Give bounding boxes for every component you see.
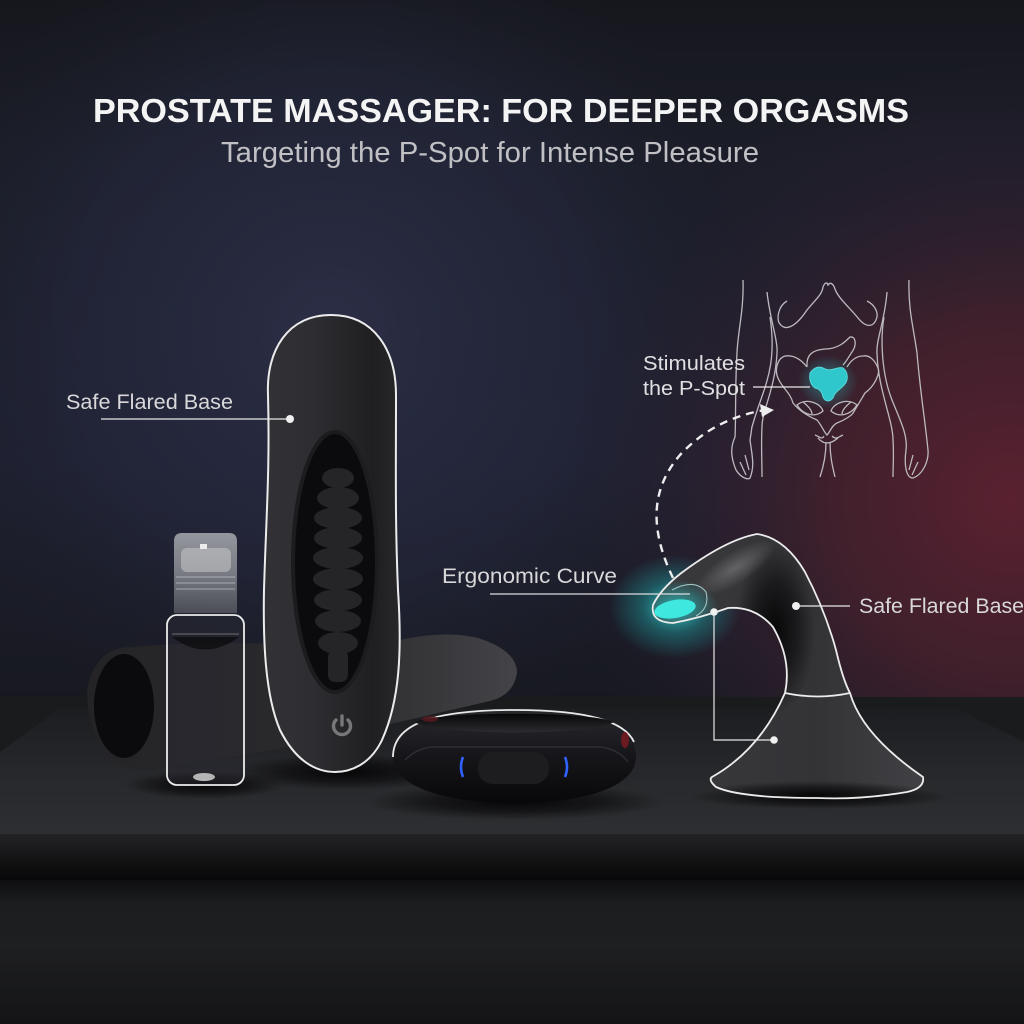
- label: Safe Flared Base left: [66, 391, 294, 423]
- subtitle: Targeting the P-Spot for Intense Pleasure: [221, 137, 759, 169]
- label: Ergonomic Curve: Ergonomic Curve: [442, 565, 617, 588]
- label: Safe Flared Base right: Safe Flared Base: [859, 595, 1024, 618]
- title: PROSTATE MASSAGER: FOR DEEPER ORGASMS: [93, 92, 909, 129]
- massager ribbed insert: [313, 468, 363, 682]
- highlighted P-Spot: [810, 367, 847, 401]
- product: rear sleeve: [87, 634, 517, 770]
- label: Stimulates the P-Spot: Stimulates: [643, 353, 745, 375]
- label: Stimulates the P-Spot: the P-Spot: [643, 378, 745, 400]
- product: large massager: [264, 315, 400, 772]
- slate platform: [0, 697, 1024, 880]
- label: Stimulates the P-Spot: [643, 353, 810, 400]
- floor: [0, 870, 1024, 1024]
- product shadows: [125, 754, 950, 820]
- label: Safe Flared Base right: [792, 595, 1024, 618]
- callout: base connector: [710, 608, 778, 744]
- arrow: curve to P-Spot: [657, 404, 774, 578]
- massager recess: [293, 432, 377, 692]
- anatomical diagram: [732, 280, 928, 479]
- product: curved massager: [614, 533, 924, 800]
- label: Safe Flared Base left: Safe Flared Base: [66, 391, 233, 414]
- product: lubricant bottle: [167, 533, 244, 785]
- product: ring: [393, 710, 636, 803]
- icon: power button: [333, 716, 350, 735]
